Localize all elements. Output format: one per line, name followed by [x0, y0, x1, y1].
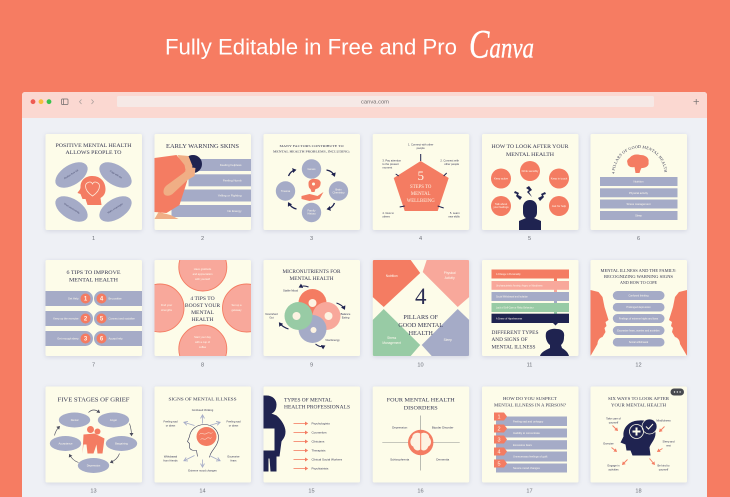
petals: [51, 157, 136, 227]
card 11: types and signs: [482, 260, 578, 356]
stage ellipses: Depression: [87, 464, 101, 468]
title: 4: [415, 284, 427, 309]
pills: Excessive fears, worries and anxieties: [617, 330, 660, 332]
title: [398, 284, 443, 337]
venn circles: [284, 289, 340, 343]
labels: [163, 408, 241, 472]
labels: Confused thinking: [192, 408, 214, 412]
tip circles: Ask for help: [552, 204, 567, 208]
number 6: 6: [637, 236, 640, 242]
icon: brain: [627, 154, 649, 173]
bars: Physical activity: [629, 191, 649, 195]
title: GOOD MENTAL: [398, 322, 443, 329]
icon: head with plus and check: [620, 419, 657, 456]
number 5: 5: [528, 236, 531, 242]
numbered badges: 4: [100, 297, 104, 303]
circle text: and appreciation: [193, 272, 213, 276]
step labels: 1. Connect with other: [408, 142, 433, 146]
title: AND SIGNS OF: [492, 337, 528, 343]
title: [282, 269, 341, 282]
bars: Feeling Numb: [223, 178, 242, 182]
step labels: to the present: [382, 162, 399, 166]
number 12: 12: [635, 362, 642, 368]
pills: Prolonged depression: [626, 306, 651, 309]
bars: Feeling sad and unhappy: [513, 420, 544, 424]
numbered badges: 5: [100, 317, 104, 323]
labels: Excessive: [227, 454, 240, 458]
tip circles: [491, 161, 569, 216]
pentagon text: 5: [417, 168, 424, 183]
title: MENTAL HEALTH: [69, 278, 118, 284]
pentagon text: MENTAL: [411, 192, 431, 197]
browser toolbar: [22, 92, 707, 118]
quadrant labels: [382, 271, 456, 345]
title: EARLY WARNING SKINS: [166, 143, 239, 150]
title: ALLOWS PEOPLE TO: [66, 150, 122, 156]
icon: brain circle: [408, 430, 433, 455]
list: Psychologists: [312, 422, 330, 426]
cross lines: [382, 416, 460, 470]
icon: person silhouette: [540, 329, 569, 356]
list: Therapists: [312, 448, 326, 452]
arrows: [280, 286, 344, 347]
labels: activities: [608, 468, 619, 472]
circle text: strengths: [161, 308, 173, 312]
card 12: family: [590, 260, 687, 356]
labels: fears: [231, 458, 237, 462]
labels: Feeling sad: [227, 420, 241, 424]
labels: Balance: [341, 312, 351, 316]
icon: stressed person: [514, 186, 546, 230]
step labels: other people: [444, 162, 460, 166]
number 18: 18: [635, 488, 642, 494]
curved title: 4 PILLARS OF GOOD MENTAL HEALTH: [612, 145, 667, 174]
number 3: 3: [310, 236, 313, 242]
circle text: with a cup of: [195, 340, 210, 344]
numbered badges: 1: [84, 297, 88, 303]
labels: Gut: [269, 316, 274, 320]
number tags: 1: [497, 414, 501, 420]
tip labels: Get enough sleep: [57, 336, 79, 340]
title: 6 TIPS TO IMPROVE: [66, 270, 121, 276]
heading: Fully Editable in Free and Pro: [165, 34, 457, 60]
bars: Nutrition: [633, 180, 644, 184]
number 15: 15: [308, 488, 315, 494]
stage ellipses: [50, 412, 137, 473]
card 6: 4 pillars: [589, 134, 688, 232]
quadrants: [373, 260, 469, 356]
stacked bars: A Change in Personality: [496, 273, 521, 276]
connectors: [396, 154, 447, 208]
card 15: professionals: [264, 386, 360, 482]
labels: Take care of: [606, 416, 621, 420]
step labels: moment: [382, 166, 392, 170]
pentagon: [394, 161, 449, 211]
labels: Depression: [392, 426, 408, 430]
title: PILLARS OF: [403, 314, 439, 321]
factor circles: Brain: [335, 188, 342, 192]
tip labels: Connect and socialize: [108, 316, 135, 320]
icon: head with heart: [78, 176, 106, 205]
step labels: [382, 142, 460, 218]
title: DIFFERENT TYPES: [492, 330, 538, 336]
stacked bars: A Sense of Hopelessness: [496, 318, 523, 320]
card 14: signs of mental illness: [154, 386, 251, 482]
tip pills: [46, 291, 142, 346]
petals: Work productively: [63, 202, 81, 215]
list: [312, 422, 343, 470]
number tags: 4: [497, 450, 501, 456]
title: MENTAL HEALTH: [506, 152, 554, 158]
list: Clinical Social Workers: [312, 458, 343, 462]
pentagon text: [407, 168, 435, 204]
icon: brain on hand: [302, 179, 324, 201]
tip labels: Keep up the exercise: [53, 316, 79, 320]
quadrant labels: Management: [382, 341, 401, 345]
factor circles: [276, 159, 348, 222]
card 8: 4 tips: [153, 260, 252, 358]
four circles: [154, 260, 251, 356]
bars: [496, 416, 567, 472]
factor circles: Genes: [308, 167, 316, 171]
tip labels: Be positive: [108, 296, 122, 300]
stacked bars: Uncharacteristic Anxiety, Anger, or Moodiness: [496, 284, 543, 288]
bars: No Energy: [227, 209, 242, 213]
title: HOW DO YOU SUSPECT: [503, 396, 557, 401]
title: SIX WAYS TO LOOK AFTER: [608, 396, 670, 401]
title: DISORDERS: [404, 406, 438, 412]
title: HEALTH PROFESSIONALS: [284, 404, 350, 410]
title: [185, 296, 220, 323]
arrows: [54, 410, 132, 462]
step labels: 3. Pay attention: [382, 158, 402, 162]
labels: or down: [229, 424, 239, 428]
step labels: others: [382, 214, 391, 218]
card 4: 5 steps: [373, 134, 469, 230]
labels: yourself: [609, 420, 618, 424]
title: HEALTH: [409, 330, 433, 337]
number 11: 11: [527, 362, 532, 368]
title: MENTAL HEALTH PROBLEMS, INCLUDING:: [273, 150, 350, 154]
factor circles: History: [307, 212, 316, 216]
bars: Severe mood changes: [513, 466, 541, 470]
arrows: [184, 416, 220, 466]
labels: [390, 426, 453, 462]
tip labels: Get Help: [68, 296, 79, 300]
list: Counselors: [312, 430, 327, 434]
labels: Extreme mood changes: [188, 468, 217, 472]
arrows: [288, 170, 334, 209]
heading: Canva: [469, 22, 534, 66]
stage ellipses: Denial: [71, 418, 79, 422]
title: [600, 268, 676, 285]
labels: Mindfulness: [656, 418, 671, 422]
numbered badges: [80, 294, 106, 344]
card 1: positive mental health: [46, 134, 142, 230]
title: [56, 143, 132, 156]
labels: Dementia: [436, 458, 449, 462]
title: MENTAL ILLNESS AND THE FAMILY:: [600, 268, 676, 273]
quadrant labels: Stress: [387, 336, 397, 340]
bars: Sleep: [635, 214, 642, 218]
title: [387, 398, 455, 412]
bars: Excessive fears: [513, 443, 532, 447]
card 13: stages of grief: [46, 386, 142, 482]
pentagon text: STEPS TO: [410, 185, 432, 190]
title: POSITIVE MENTAL HEALTH: [56, 143, 132, 149]
number 14: 14: [199, 488, 206, 494]
title: HOW TO LOOK AFTER YOUR: [492, 144, 569, 150]
numbered badges: 2: [84, 317, 88, 323]
number 13: 13: [90, 488, 97, 494]
circle text: Set up a: [231, 303, 242, 307]
number 10: 10: [417, 362, 424, 368]
bars: Stress management: [626, 202, 651, 206]
number 1: 1: [92, 236, 95, 242]
illustration: distressed person: [154, 155, 202, 219]
numbered badges: 3: [84, 337, 88, 343]
icon: professional figure: [264, 396, 286, 472]
tip circles: Talk about: [495, 202, 507, 206]
arrows: [612, 426, 664, 464]
circle text: [161, 267, 242, 349]
pentagon text: WELLBEING: [407, 199, 435, 204]
labels: Withdrawal: [164, 454, 178, 458]
step labels: 2. Connect with: [440, 158, 459, 162]
labels: Feeling sad: [164, 420, 178, 424]
card 17: suspect: [482, 386, 578, 482]
number 16: 16: [417, 488, 424, 494]
title: MANY FACTORS CONTRIBUTE TO: [280, 144, 344, 148]
title: MENTAL ILLNESS IN A PERSON?: [494, 402, 566, 408]
card 10: 4 pillars diamond: [373, 260, 469, 356]
icon: head with brain: [188, 424, 218, 458]
labels: Engage in: [607, 464, 620, 468]
labels: Eating: [342, 316, 350, 320]
stacked bars: Social Withdrawal and Isolation: [496, 296, 529, 298]
card 3: factors: [264, 134, 360, 230]
labels: rest: [666, 444, 671, 448]
card 2: early warning signs: [154, 134, 251, 230]
labels: Exercise: [603, 442, 614, 446]
card 18: six ways: [590, 386, 687, 482]
labels: Nourished: [265, 312, 278, 316]
stacked bars: Lack of Self-Care or Risky Behaviour: [496, 306, 534, 310]
circle text: Start your day: [194, 335, 212, 339]
labels: Schizophrenia: [390, 458, 410, 462]
number 4: 4: [419, 236, 422, 242]
quadrant labels: Sleep: [444, 338, 452, 342]
number 2: 2: [201, 236, 204, 242]
card 7: 6 tips: [46, 260, 142, 356]
circle text: Have gratitude: [194, 267, 212, 271]
arrows: [294, 424, 308, 468]
card 5: how to look after: [482, 134, 578, 230]
quadrant labels: Activity: [445, 276, 455, 280]
pills: Social withdrawal: [629, 341, 649, 344]
factor circles: Trauma: [281, 189, 291, 193]
title: RECOGNIZING WARNING SIGNS: [604, 274, 674, 279]
pills: Confused thinking: [628, 294, 649, 298]
title: MICRONUTRIENTS FOR: [282, 269, 341, 275]
title: [284, 398, 350, 410]
circle text: coffee: [199, 345, 207, 349]
labels: Vital Energy: [325, 338, 340, 342]
title: TYPES OF MENTAL: [284, 398, 333, 404]
tip circles: Keep in touch: [551, 176, 568, 180]
step labels: 4. Give to: [382, 211, 394, 215]
number 9: 9: [310, 362, 313, 368]
step labels: new skills: [448, 214, 460, 218]
title: 4 TIPS TO: [190, 296, 215, 302]
title: [608, 396, 670, 408]
icon: family: [82, 426, 104, 454]
list: Clinicians: [312, 440, 325, 444]
bars: [600, 177, 678, 220]
bars: [172, 159, 251, 217]
petals: Cope with the: [109, 170, 123, 180]
labels: [603, 416, 675, 472]
title: MENTAL HEALTH: [290, 276, 334, 282]
stage ellipses: Acceptance: [58, 442, 73, 446]
title: YOUR MENTAL HEALTH: [611, 402, 667, 408]
quadrant labels: Nutrition: [386, 274, 398, 278]
tip labels: [53, 296, 135, 340]
title: FOUR MENTAL HEALTH: [387, 398, 455, 404]
heading: [165, 22, 534, 66]
browser toolbar: canva.com: [361, 100, 389, 106]
card 16: four disorders: [373, 386, 469, 482]
bars: Unnecessary feelings of guilt: [513, 454, 548, 458]
tip labels: Accept help: [108, 336, 123, 340]
stage ellipses: Anger: [110, 418, 117, 422]
title: [492, 330, 538, 350]
labels: Stable Mood: [283, 288, 299, 292]
tip circles: Drink sensibly: [522, 169, 539, 173]
step labels: people: [417, 146, 425, 150]
labels: or down: [166, 424, 176, 428]
pills: Feelings of extreme highs and lows: [619, 318, 659, 320]
labels: from friends: [163, 458, 178, 462]
title: [494, 396, 566, 408]
number tags: 3: [497, 438, 501, 444]
title: MENTAL ILLNESS: [492, 344, 536, 350]
factor circles: Family: [308, 208, 316, 212]
bars: Feeling helpless: [220, 163, 242, 167]
labels: Be kind to: [658, 464, 670, 468]
stage ellipses: Bargaining: [115, 442, 128, 446]
number 8: 8: [201, 362, 204, 368]
circle text: with yourself: [195, 277, 210, 281]
title: [66, 270, 121, 284]
stacked bars: [492, 270, 569, 326]
title: MENTAL: [191, 310, 215, 316]
numbered badges: 6: [100, 337, 104, 343]
tip circles: Keep active: [494, 176, 509, 180]
face silhouettes: [590, 290, 687, 356]
number 7: 7: [92, 362, 95, 368]
browser window: [22, 92, 707, 497]
labels: [265, 288, 351, 342]
title: HEALTH: [192, 317, 213, 323]
factor circles: Chemistry: [332, 190, 345, 194]
title: [492, 144, 569, 158]
circle text: Find your: [161, 303, 172, 307]
petals: Make meaningful: [108, 203, 124, 214]
step labels: 5. Learn: [450, 211, 460, 215]
title: SIGNS OF MENTAL ILLNESS: [168, 396, 237, 402]
number tags: [494, 412, 507, 468]
petals: Realize their full: [64, 169, 79, 180]
bars: Inability to concentrate: [513, 431, 540, 435]
quadrant labels: Physical: [444, 271, 456, 275]
title: FIVE STAGES OF GRIEF: [58, 396, 130, 404]
pills: [613, 291, 664, 346]
number tags: 5: [497, 462, 501, 468]
bars: Yelling or Fighting: [218, 194, 242, 198]
number tags: 2: [497, 426, 501, 432]
card 9: micronutrients: [264, 260, 360, 356]
title: [273, 144, 350, 154]
labels: yourself: [659, 468, 668, 472]
tip circles: your feelings: [493, 205, 509, 209]
labels: Sleep and: [662, 440, 675, 444]
number 17: 17: [526, 488, 533, 494]
list: Psychiatrists: [312, 466, 329, 470]
circle text: getaway: [231, 308, 242, 312]
title: BOOST YOUR: [185, 303, 220, 309]
labels: Bipolar Disorder: [432, 426, 453, 430]
more-options pill: [670, 388, 684, 396]
title: AND HOW TO COPE: [620, 280, 657, 285]
